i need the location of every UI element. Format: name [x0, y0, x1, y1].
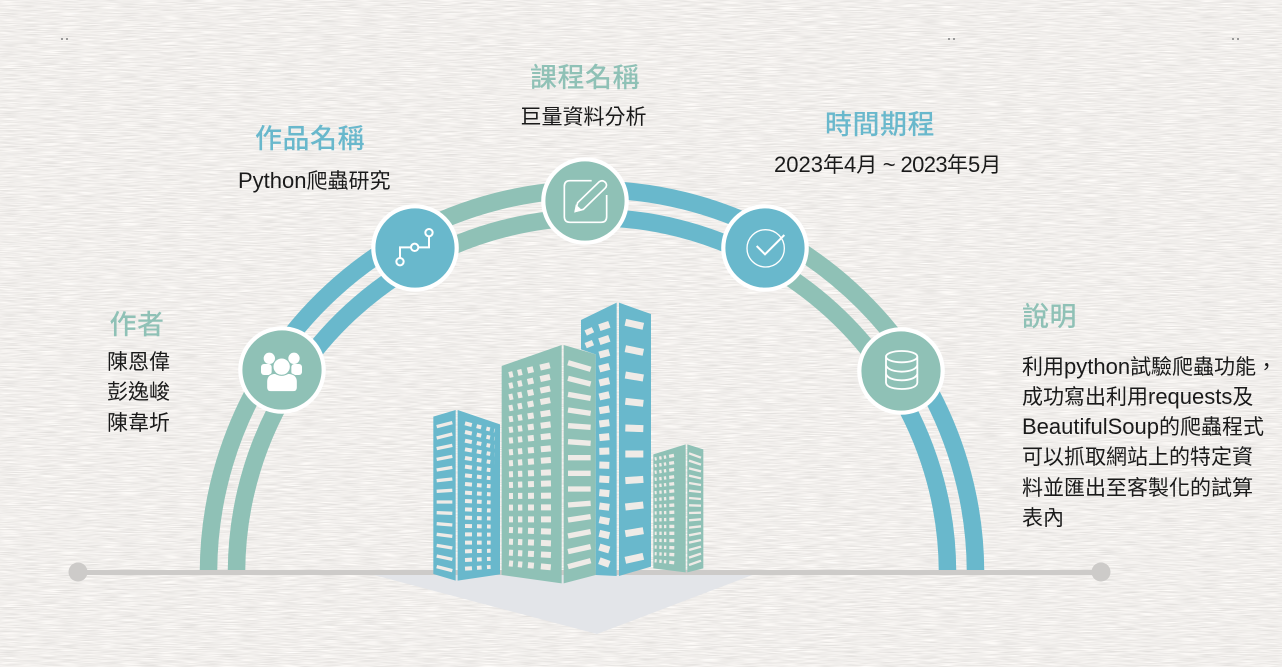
ground shadow — [370, 574, 755, 634]
description body: 料並匯出至客製化的試算 — [1022, 477, 1253, 500]
block: project text — [238, 124, 390, 193]
building: small right teal block — [653, 444, 703, 572]
node: description — [859, 329, 943, 413]
icon: route path — [396, 229, 433, 265]
building: central teal block — [502, 345, 596, 583]
project name: Python爬蟲研究 — [238, 168, 390, 193]
heading: course name: 課程名稱 — [530, 63, 640, 93]
description body — [1022, 354, 1277, 530]
block: author text — [107, 310, 170, 435]
course name: 巨量資料分析 — [520, 106, 646, 129]
icon: people — [261, 353, 302, 392]
node: schedule — [723, 206, 807, 290]
building: tall blue tower — [581, 303, 651, 576]
description body: BeautifulSoup的爬蟲程式 — [1022, 414, 1264, 439]
node: project — [373, 206, 457, 290]
small corner marks — [61, 38, 1239, 40]
description body: 利用python試驗爬蟲功能， — [1022, 354, 1277, 379]
heading: description: 說明 — [1022, 302, 1077, 332]
ground line with end dots — [68, 562, 1110, 582]
heading: author: 作者 — [110, 310, 164, 340]
description body: 表內 — [1022, 507, 1064, 530]
outer and inner arch bands — [208, 190, 976, 571]
city buildings — [433, 303, 703, 583]
description body: 成功寫出利用requests及 — [1022, 384, 1253, 409]
node: author — [240, 328, 324, 412]
author names — [107, 351, 170, 435]
date range: 2023年4月 ~ 2023年5月 — [774, 152, 1001, 177]
description body: 可以抓取網站上的特定資 — [1022, 446, 1253, 469]
building: left blue block — [433, 410, 500, 581]
block: course text — [520, 63, 646, 129]
author names: 陳韋圻 — [107, 412, 170, 435]
block: schedule text — [774, 110, 1001, 177]
node: course — [543, 159, 627, 243]
icon: check circle — [747, 230, 784, 267]
icon: pencil and note — [564, 181, 607, 222]
heading: project name: 作品名稱 — [255, 124, 365, 154]
author names: 陳恩偉 — [107, 351, 170, 374]
icon: database — [886, 351, 917, 389]
author names: 彭逸峻 — [107, 381, 170, 404]
heading: schedule: 時間期程 — [825, 110, 935, 140]
block: description text — [1022, 302, 1277, 530]
